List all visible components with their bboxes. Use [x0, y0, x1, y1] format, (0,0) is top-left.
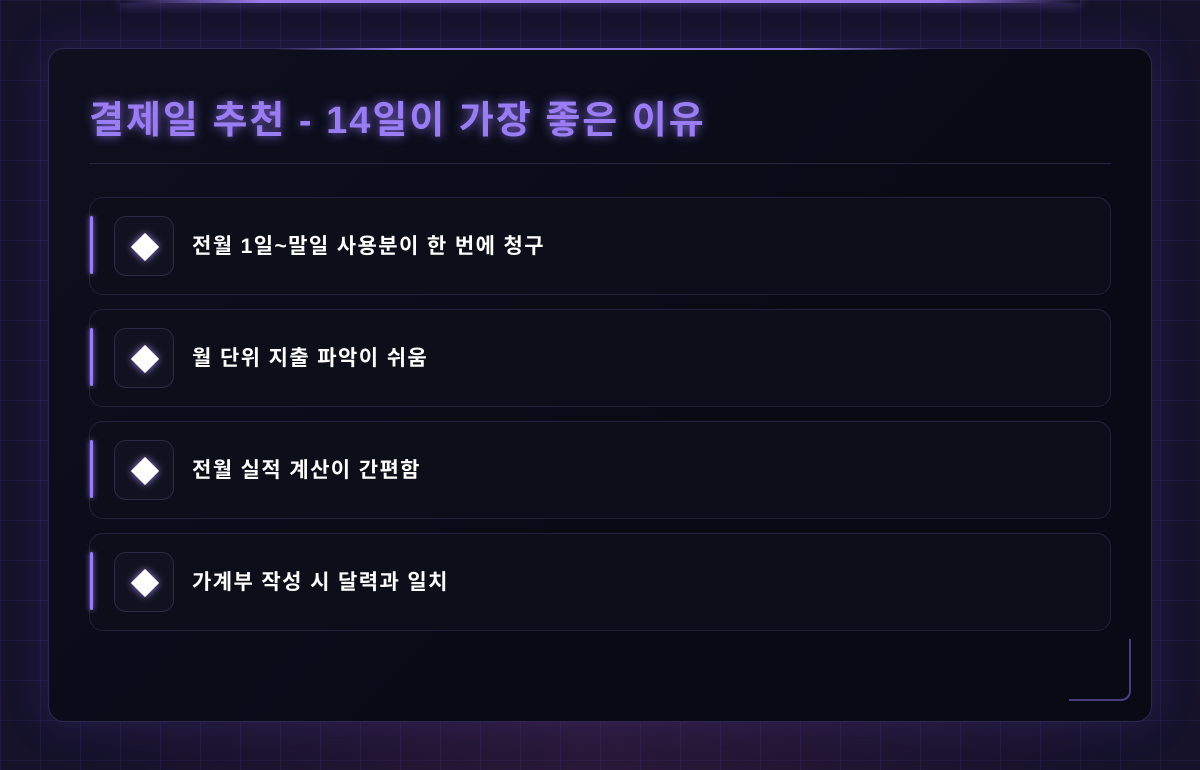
item 3 — [89, 421, 1111, 519]
corner decoration — [1069, 639, 1131, 701]
text: 전월 실적 계산이 간편함 — [192, 459, 421, 482]
icon: diamond — [114, 216, 174, 276]
title: 결제일 추천 - 14일이 가장 좋은 이유 — [89, 100, 706, 142]
item 4 — [89, 533, 1111, 631]
text: 월 단위 지출 파악이 쉬움 — [192, 347, 428, 370]
text: 가계부 작성 시 달력과 일치 — [192, 571, 449, 594]
icon: diamond — [114, 552, 174, 612]
icon: diamond — [114, 328, 174, 388]
item 2 — [89, 309, 1111, 407]
item 1 — [89, 197, 1111, 295]
text: 전월 1일~말일 사용분이 한 번에 청구 — [192, 235, 545, 258]
icon: diamond — [114, 440, 174, 500]
